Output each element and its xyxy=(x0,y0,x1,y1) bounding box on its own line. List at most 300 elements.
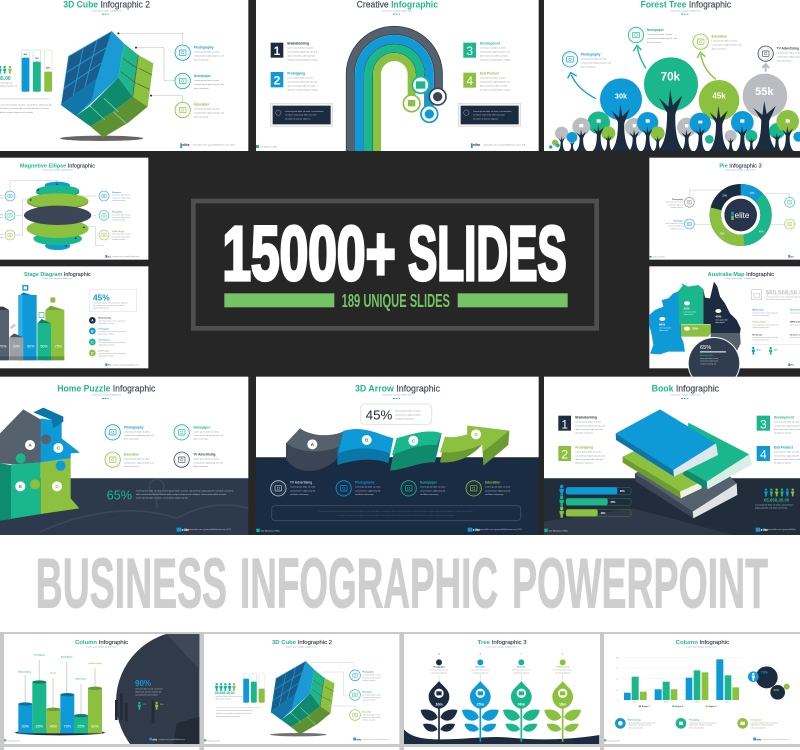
panel: 3D Cube Infographic 2 thumbnail: Insert your sample subtitle here xyxy=(287,645,318,648)
step 3 xyxy=(757,415,800,435)
state list: Lorem ipsum dolor sit amet, adipiscing xyxy=(752,311,778,314)
side icons: Newspaper xyxy=(674,220,684,222)
icons: consectetuer adipiscing elit, xyxy=(362,716,381,719)
step 1: Brainstorming xyxy=(575,415,597,419)
step 1: Lorem ipsum dolor sit amet, xyxy=(575,421,602,424)
state list: sed diam nonummy nibh xyxy=(752,340,769,342)
chart: Australia map: adipiscing elit xyxy=(684,313,693,316)
panel: 3D Cube Infographic 2: consectetuer adipiscing elit, sed xyxy=(194,55,225,58)
panel: Pie Infographic 3: Pie Infographic 3 xyxy=(719,163,762,169)
callout 45%: elit, sed diam nonummy nibh euismod tincidunt xyxy=(93,304,125,307)
plant: teal: C xyxy=(521,654,523,656)
callout right: tincidunt ut laoreet aliquam. xyxy=(473,117,499,120)
chart: cylinders: Launch Project xyxy=(88,662,102,665)
subheading with green bars: 189 UNIQUE SLIDES xyxy=(342,291,450,311)
panel: 3D Cube Infographic 2 thumbnail: Our Business Plan xyxy=(207,739,220,742)
heading: Business Infographic PowerPoint: BUSINESS xyxy=(36,544,227,623)
panel: Home Puzzle Infographic xyxy=(0,377,248,535)
icons: sed diam nonummy xyxy=(362,700,376,702)
state list: Lorem ipsum dolor sit amet, adipiscing xyxy=(752,336,778,339)
chart: cylinders: 85% xyxy=(36,725,44,729)
chart: grouped bars: Item 2 xyxy=(664,701,668,704)
panel: Column Infographic bar chart: www.elite.com | yourmail@domain.com xyxy=(763,738,790,741)
list A-D: C xyxy=(91,340,94,344)
plant: green: D xyxy=(562,654,564,656)
side icons: consectetuer adipiscing xyxy=(668,225,683,228)
chart: grouped bars: 50 xyxy=(616,679,618,681)
panel: Stage Diagram Infographic: Stage Diagram Infographic xyxy=(24,272,91,278)
step 4: 4 xyxy=(466,74,473,88)
panel: Column Infographic bar chart: elite xyxy=(756,738,762,741)
step 3: tincidunt ut laoreet dolore magna xyxy=(480,58,511,61)
plant: teal xyxy=(503,654,540,742)
chart: Australia map: Lorem ipsum dolor sit amet, xyxy=(700,357,719,360)
icon row: sed diam nonummy. xyxy=(290,494,309,496)
icon row: consectetuer adipiscing elit, xyxy=(355,489,381,492)
step 1: 1 xyxy=(274,44,281,58)
icon legend: Education xyxy=(124,453,139,457)
tree circles and trunks: 45k xyxy=(712,91,726,100)
next row of thumbnails, cropped at the page edge xyxy=(4,747,800,750)
side icons: Lorem ipsum dolor sit amet xyxy=(665,222,684,225)
list A-D: A xyxy=(91,319,94,323)
list A-D: adipiscing elit, sed diam xyxy=(98,344,115,347)
icon labels: Lorem ipsum dolor sit amet, xyxy=(581,57,607,60)
stat: map total xyxy=(752,289,800,301)
step 1: 1 xyxy=(561,417,568,431)
icon legend: Lorem ipsum dolor sit amet, xyxy=(124,458,150,461)
heading: Business Infographic PowerPoint xyxy=(36,544,768,623)
icon legend: Lorem ipsum dolor sit amet, xyxy=(193,458,220,461)
panel: 3D Cube Infographic 2: sed diam nonummy nibh euismod tincidunt ut laoreet xyxy=(0,107,49,110)
stat: 65%: Lorem ipsum dolor sit amet, consectetuer adipiscing elit. xyxy=(136,497,189,500)
step 3: Development xyxy=(774,415,795,419)
icon row: Lorem ipsum dolor sit amet, xyxy=(355,486,381,489)
step 4: Lorem ipsum dolor sit amet, xyxy=(480,77,506,80)
step 2: 2 xyxy=(274,73,281,87)
step 2: tincidunt ut laoreet. xyxy=(575,462,593,465)
step 1: Brainstorming xyxy=(287,41,309,45)
ellipse side icons: sed diam nonummy xyxy=(112,220,125,222)
panel: Column Infographic bar chart: Insert your sample subtitle here xyxy=(687,645,718,648)
panel: 3D Arrow Infographic: 3D Arrow Infographic xyxy=(355,384,440,394)
list A-D: Lorem ipsum dolor sit amet, consectetuer xyxy=(98,330,126,333)
side icons: sed diam nonummy xyxy=(670,228,684,230)
bars: gauge columns: 40% xyxy=(46,67,50,70)
step 1 xyxy=(558,415,606,435)
bottom items: Brainstorming xyxy=(628,718,640,721)
step 2: Prototyping xyxy=(575,445,593,449)
plant: navy: Photography xyxy=(433,666,445,669)
step 1: consectetuer adipiscing elit, sed xyxy=(287,50,318,53)
panel: 3D Cube Infographic 2: consectetuer adipiscing elit, sed xyxy=(194,83,225,86)
chart: 3D stage bars xyxy=(0,285,64,360)
icons: consectetuer adipiscing elit, xyxy=(362,676,381,679)
panel: 3D Cube Infographic 2 thumbnail: 3D Cube Infographic 2 xyxy=(272,640,332,646)
icons: sed diam nonummy xyxy=(362,720,376,722)
arrow: 3D segmented arrow: A xyxy=(311,442,315,447)
panel: Stage Diagram Infographic: Insert your sample subtitle here xyxy=(43,277,74,280)
step 3: Lorem ipsum dolor sit amet, xyxy=(774,421,800,424)
ellipse side icons: sed diam nonummy xyxy=(112,200,125,202)
panel: Creative Infographic: Our Business Plan xyxy=(260,145,278,148)
step 4: 4 xyxy=(760,448,767,462)
icon labels: TV Advertising xyxy=(777,47,799,51)
icons: Lorem ipsum dolor sit amet, xyxy=(362,674,381,677)
icon labels xyxy=(562,27,800,68)
chart: cylinders: 70% xyxy=(64,725,72,729)
icon labels: diam nonummy. xyxy=(647,42,662,44)
chart: Australia map: Lorem ipsum dolor xyxy=(659,326,672,329)
icon labels: diam nonummy. xyxy=(712,49,727,51)
bottom items: Lorem ipsum dolor sit amet, consectetuer xyxy=(689,721,717,724)
step 2 xyxy=(271,71,319,91)
panel: Column Infographic photo: Insert your sample subtitle here xyxy=(87,645,118,648)
step 3 xyxy=(463,41,511,61)
stat: 65%: 65% xyxy=(107,488,132,502)
panel: Column Infographic bar chart: Column Infographic xyxy=(676,640,729,646)
panel: Tree Infographic 3: Lorem ipsum dolor sit amet, xyxy=(430,669,449,672)
side icons xyxy=(665,197,795,230)
panel: Column Infographic photo: Column Infographic xyxy=(75,640,128,646)
icon row: Lorem ipsum dolor sit amet, xyxy=(420,486,446,489)
stat: people row: adipiscing elit, sed diam nonummy xyxy=(755,507,788,510)
callout 45% xyxy=(361,404,432,424)
icon legend: consectetuer adipiscing elit, sed xyxy=(124,461,155,464)
heading: 15000+ SLIDES: SLIDES xyxy=(408,211,567,297)
callout 45%: 45% xyxy=(366,407,392,422)
donut centre logo xyxy=(720,193,764,235)
panel: Pie Infographic 3 xyxy=(649,158,800,260)
ellipse side icons: Lorem ipsum dolor sit amet, xyxy=(112,194,131,197)
chart: donut xyxy=(715,190,766,240)
stat: 90%: 90% xyxy=(135,679,151,688)
stat: 90%: 65% xyxy=(143,704,147,706)
panel: 3D Cube Infographic 2: Lorem ipsum dolor sit amet, xyxy=(194,51,220,54)
stat: 90%: euismod tincidunt ut laoreet dolore xyxy=(135,693,158,696)
stat: people row: 65,658,35.00 xyxy=(764,498,790,503)
panel: 3D Cube Infographic 2: diam nonummy. xyxy=(194,60,209,62)
state list: sed diam nonummy nibh xyxy=(752,327,769,329)
icon legend: TV Advertising xyxy=(193,453,216,457)
chart: grouped bars xyxy=(616,657,743,708)
plant: green: TV Advertising xyxy=(556,666,569,669)
white band behind bottom title xyxy=(0,535,800,632)
callout left xyxy=(270,103,333,126)
icon labels: Photography xyxy=(581,52,601,56)
chart: grouped bars: 75 xyxy=(616,668,618,670)
chart: Australia map xyxy=(649,282,741,390)
step 2: 2 xyxy=(561,448,568,462)
chart: grouped bars: Item 4 xyxy=(726,701,730,704)
state list: Lorem ipsum dolor sit amet, adipiscing xyxy=(752,323,778,326)
panel: Magnetive Ellipse Infographic: elite xyxy=(107,255,112,258)
state list: sed diam nonummy nibh xyxy=(752,315,769,317)
list A-D: End Product xyxy=(98,349,110,352)
panel: Book Infographic: www.elite.com | yourmail@do xyxy=(768,528,796,531)
arrow: 3D segmented arrow: B xyxy=(365,438,369,443)
panel: 3D Arrow Infographic: www.elite.com | yourmail@domain.com | 118 xyxy=(480,528,522,531)
panel: 3D Cube Infographic 2 thumbnail: 65,658,35.00 xyxy=(215,691,235,695)
bars: gauge columns: 90% xyxy=(23,54,28,56)
callout left: tincidunt ut laoreet aliquam. xyxy=(285,117,311,120)
panel: 3D Cube Infographic 2: diam nonummy. xyxy=(194,88,209,90)
chart: Australia map: 80% xyxy=(659,322,665,326)
grey strip behind thumbnails xyxy=(0,632,800,750)
callout right xyxy=(458,103,521,126)
chart: cylinders: Brainstorming xyxy=(18,670,31,673)
list A-D: adipiscing elit, sed diam xyxy=(98,355,115,358)
panel: Tree Infographic 3: consectetuer adipiscing xyxy=(472,671,488,674)
icon row: consectetuer adipiscing elit, xyxy=(485,489,511,492)
icon legend: Newspaper xyxy=(193,425,211,429)
stat: map total: elit, sed diam nonummy nibh euismod xyxy=(766,298,791,301)
panel: Column Infographic photo: www.elite.com | yourmail@domain.com xyxy=(159,738,186,741)
step 4 xyxy=(757,445,800,465)
panel: 3D Arrow Infographic: Our Business Plan xyxy=(261,530,281,532)
panel: Forest Tree Infographic: Insert your sample subtitle here xyxy=(671,9,702,12)
panel: 3D Cube Infographic 2: elite xyxy=(182,143,190,147)
tree circles and trunks: 55k xyxy=(755,86,774,98)
icon labels: consectetuer adipiscing elit, sed xyxy=(647,37,678,40)
panel: Tree Infographic 3: Tree Infographic 3 xyxy=(478,640,527,646)
panel: 3D Cube Infographic 2 thumbnail xyxy=(204,634,399,744)
subheading with green bars xyxy=(224,291,568,311)
plant: navy: A xyxy=(438,653,440,656)
step 2 xyxy=(558,445,606,465)
panel: Column Infographic photo: elite xyxy=(152,738,158,741)
panel: Column Infographic photo: Our Business Plan xyxy=(7,739,20,742)
state list xyxy=(752,309,800,355)
ellipse side icons: Prototyping xyxy=(112,211,122,214)
panel: 3D Cube Infographic 2 thumbnail: dolore magna aliquam erat volutpat. xyxy=(216,715,241,718)
state list: WA Australia xyxy=(752,309,764,312)
state list: Male xyxy=(757,349,761,351)
panel: Book Infographic xyxy=(544,377,800,535)
list A-D xyxy=(89,317,126,358)
panel: Tree Infographic 3: consectetuer adipiscing xyxy=(513,671,529,674)
step 1: tincidunt ut laoreet. xyxy=(575,432,593,435)
stat: map total: Lorem ipsum dolor sit amet, consectetuer adipiscing xyxy=(766,295,800,298)
step 2: tincidunt ut laoreet dolore magna xyxy=(287,88,319,91)
chart: Australia map: sed diam nonummy nibh xyxy=(700,363,717,365)
state list: NT Queensland xyxy=(752,322,766,324)
panel: 3D Cube Infographic 2: dolore magna aliquam erat volutpat. xyxy=(0,111,34,114)
bottom items: Development xyxy=(751,718,763,721)
dark background xyxy=(0,0,800,535)
step 3: consectetuer adipiscing elit, sed xyxy=(480,50,511,53)
panel: 3D Cube Infographic 2: Lorem ipsum xyxy=(0,81,12,84)
icon row: Lorem ipsum dolor sit amet, xyxy=(485,486,511,489)
side icons: Photography xyxy=(672,198,683,201)
callout 45%: 45% xyxy=(93,292,110,302)
illustration: puzzle house: A xyxy=(28,443,32,448)
panel: Stage Diagram Infographic xyxy=(0,266,148,368)
chart: grouped bars: 25 xyxy=(616,689,618,691)
step 2: Lorem ipsum dolor sit amet, xyxy=(575,451,602,454)
icon row: Newspaper xyxy=(420,481,438,485)
bottom items: adipiscing elit, sed diam nonummy xyxy=(689,724,712,727)
panel: Tree Infographic 3: Lorem ipsum dolor sit amet, xyxy=(553,669,572,672)
step 4: tincidunt ut laoreet. xyxy=(774,462,792,465)
chart: cylinders: Prototyping xyxy=(34,654,44,657)
list A-D: adipiscing elit, sed diam xyxy=(98,333,115,336)
icon row: consectetuer adipiscing elit, xyxy=(420,489,446,492)
panel: 3D Cube Infographic 2 thumbnail: elite xyxy=(356,738,362,741)
icon row: sed diam nonummy. xyxy=(420,494,439,496)
icons: Newspaper xyxy=(362,691,372,693)
callout 45%: ut laoreet dolore magna xyxy=(93,307,109,310)
plant: teal: Education xyxy=(517,666,526,669)
panel: Tree Infographic 3: consectetuer adipiscing xyxy=(431,671,447,674)
step 2: Lorem ipsum dolor sit amet, xyxy=(287,77,314,80)
panel: Home Puzzle Infographic: Insert your sample subtitle here xyxy=(92,394,123,397)
side icons: consectetuer adipiscing xyxy=(668,203,683,206)
step 1 xyxy=(271,41,319,61)
panel: Australia Map Infographic: Australia Map Infographic xyxy=(708,272,774,278)
panel: Magnetive Ellipse Infographic xyxy=(0,158,148,260)
callout right: sed diam nonummy nibh euismod xyxy=(473,115,505,117)
panel: Stage Diagram Infographic: www.elite.com | yourmail@domain.com xyxy=(113,363,140,366)
step 3: Lorem ipsum dolor sit amet, xyxy=(480,47,506,50)
step 4: tincidunt ut laoreet dolore magna xyxy=(480,88,511,91)
chart: Australia map: 65% xyxy=(700,345,711,351)
step 3: 3 xyxy=(760,417,767,431)
chart: progress bars: 80% xyxy=(620,491,626,493)
icon row: Education xyxy=(485,481,500,485)
panel: 3D Arrow Infographic: Insert your sample subtitle here xyxy=(382,394,413,397)
panel: Pie Infographic 3: Our Business Plan xyxy=(652,256,665,259)
panel: 3D Cube Infographic 2: Photography xyxy=(194,46,214,50)
icon labels: Lorem ipsum dolor sit amet, xyxy=(712,40,738,43)
callout left: Lorem ipsum dolor sit amet, consectetuer, xyxy=(285,110,324,113)
step 3: tincidunt ut laoreet. xyxy=(774,432,792,435)
panel: Home Puzzle Infographic: elite xyxy=(182,528,189,532)
arrows xyxy=(568,45,769,99)
bottom items: adipiscing elit, sed diam nonummy xyxy=(628,724,651,727)
icon row: sed diam nonummy. xyxy=(485,494,504,496)
icon row: TV Advertising xyxy=(290,481,312,485)
panel: Home Puzzle Infographic: www.elite.com | yourmail@domain.com | 101 xyxy=(189,528,232,531)
panel: Australia Map Infographic: elite xyxy=(790,364,795,367)
stat: 90%: adipiscing elit, sed diam nonummy nibh xyxy=(135,690,161,693)
panel: 3D Cube Infographic 2: Education xyxy=(194,103,209,107)
bottom items: nibh euismod tincidunt xyxy=(751,726,766,729)
panel: 3D Cube Infographic 2: Newspaper xyxy=(194,74,212,78)
heading: 15000+ SLIDES: 15000+ xyxy=(222,211,396,297)
panel: Tree Infographic 3 xyxy=(404,634,600,744)
side icons: Lorem ipsum dolor sit amet xyxy=(665,201,684,204)
icon labels: Newspaper xyxy=(647,28,665,32)
chart: 3D stage bars: 75% xyxy=(55,345,63,349)
panel: Tree Infographic 3: Lorem ipsum dolor sit amet, xyxy=(512,669,531,672)
plant: green: 18m xyxy=(559,702,567,706)
illustration: puzzle house xyxy=(0,408,80,521)
icons xyxy=(350,670,381,722)
ellipse side icons xyxy=(0,191,131,241)
donut centre logo: 25% xyxy=(722,196,727,198)
panel: Creative Infographic: www.elite.com | yourmail@domain.com | 105 xyxy=(483,144,526,147)
state list: NC Victoria xyxy=(752,333,763,336)
panel: Stage Diagram Infographic: elite xyxy=(107,364,112,367)
step 1: tincidunt ut laoreet dolore magna xyxy=(287,58,319,61)
callout 45% xyxy=(89,289,137,312)
icon legend: diam nonummy. xyxy=(124,466,139,468)
panel: Home Puzzle Infographic: Home Puzzle Infographic xyxy=(57,384,156,394)
icon row: consectetuer adipiscing elit, xyxy=(290,489,316,492)
step 3: 3 xyxy=(466,44,473,58)
chart: 3D stage bars: 90% xyxy=(27,345,35,349)
step 1: Lorem ipsum dolor sit amet, xyxy=(287,47,314,50)
panel: Magnetive Ellipse Infographic: Magnetive Ellipse Infographic xyxy=(20,163,95,169)
icon labels: diam nonummy. xyxy=(581,66,596,68)
chart: Australia map: adipiscing elit xyxy=(715,321,725,324)
stat: 65%: Lorem ipsum dolor sit amet, Lorem ipsum dolor sit amet, consectetuer adipiscing elit, sed diam nonummy xyxy=(136,490,234,493)
stat circles: 70% xyxy=(761,670,769,674)
icons: Education xyxy=(362,710,371,713)
chart: cylinders: 40% xyxy=(50,725,58,729)
panel: 3D Arrow Infographic: elite xyxy=(473,528,480,532)
donut centre logo: 45% xyxy=(759,231,764,233)
panel: Tree Infographic 3: Insert your sample subtitle here xyxy=(487,645,518,648)
chart: 3D stage bars: 30% xyxy=(13,345,21,349)
plant: teal: 06m xyxy=(518,702,526,706)
panel: Creative Infographic: Insert your sample subtitle here xyxy=(382,9,413,12)
panel: Column Infographic bar chart: Our Business Plan xyxy=(607,739,620,742)
tree circles and trunks: 30k xyxy=(615,92,628,101)
heading: Business Infographic PowerPoint: INFOGRAPHIC xyxy=(240,544,498,623)
step 1: diam nonummy nibh euismod xyxy=(287,55,316,57)
panel: 3D Cube Infographic 2: consectetuer adipiscing elit, sed xyxy=(194,112,225,115)
chart: 3D stage bars: 50% xyxy=(40,345,48,349)
step 4: End Product xyxy=(774,445,794,449)
panel: 3D Cube Infographic 2: Insert your sample subtitle here xyxy=(92,9,123,12)
text box: Lorem ipsum dolor sit amet, consectetuer adipiscing elit, sed diam nonummy nibh euismod tincidunt ut laoreet dolore magna aliquam erat volutpat. Lorem ipsum dolor xyxy=(319,510,473,513)
plant: navy xyxy=(421,653,457,742)
bottom items: Prototyping xyxy=(689,718,699,721)
plant: blue: B xyxy=(480,654,482,656)
step 3: diam nonummy nibh euismod xyxy=(480,55,508,57)
icon legend xyxy=(105,425,224,468)
stat: 90%: 35% xyxy=(160,704,164,706)
callout 45%: Lorem ipsum dolor sit amet, xyxy=(395,410,421,413)
chart: Australia map: 20% xyxy=(692,327,699,331)
chart: cylinders: Design xyxy=(50,673,56,675)
bottom items xyxy=(615,718,779,729)
chart: Australia map: Lorem ipsum dolor xyxy=(684,310,697,313)
ellipse side icons: consectetuer adipiscing elit xyxy=(112,235,131,238)
arrow: 3D segmented arrow: D xyxy=(474,432,478,437)
icon row: Photography xyxy=(355,481,375,485)
panel: Column Infographic photo xyxy=(4,634,200,744)
step 3: Development xyxy=(480,41,501,45)
icon labels: consectetuer adipiscing elit, sed xyxy=(581,61,612,64)
chart: cylinders: Development xyxy=(61,655,73,658)
icon legend: Photography xyxy=(124,425,144,429)
illustration: puzzle house: C xyxy=(57,446,61,451)
icons: sed diam nonummy xyxy=(362,680,376,682)
chart: grouped bars: Region 1 xyxy=(642,706,650,708)
chart: stacked ellipses xyxy=(24,182,91,250)
ellipse side icons: Lorem ipsum dolor sit amet, xyxy=(112,213,131,216)
panel: 3D Cube Infographic 2 thumbnail: Lorem ipsum dolor sit amet, consectetuer xyxy=(215,695,243,698)
step 2: consectetuer adipiscing elit, sed xyxy=(575,454,606,457)
ellipse side icons: consectetuer adipiscing elit xyxy=(112,216,131,219)
panel: Australia Map Infographic xyxy=(649,266,800,390)
icon legend: consectetuer adipiscing elit, sed xyxy=(193,461,224,464)
bars: gauge columns: 70% xyxy=(35,58,39,60)
chart: Australia map: consectetuer adipiscing elit xyxy=(700,360,719,363)
